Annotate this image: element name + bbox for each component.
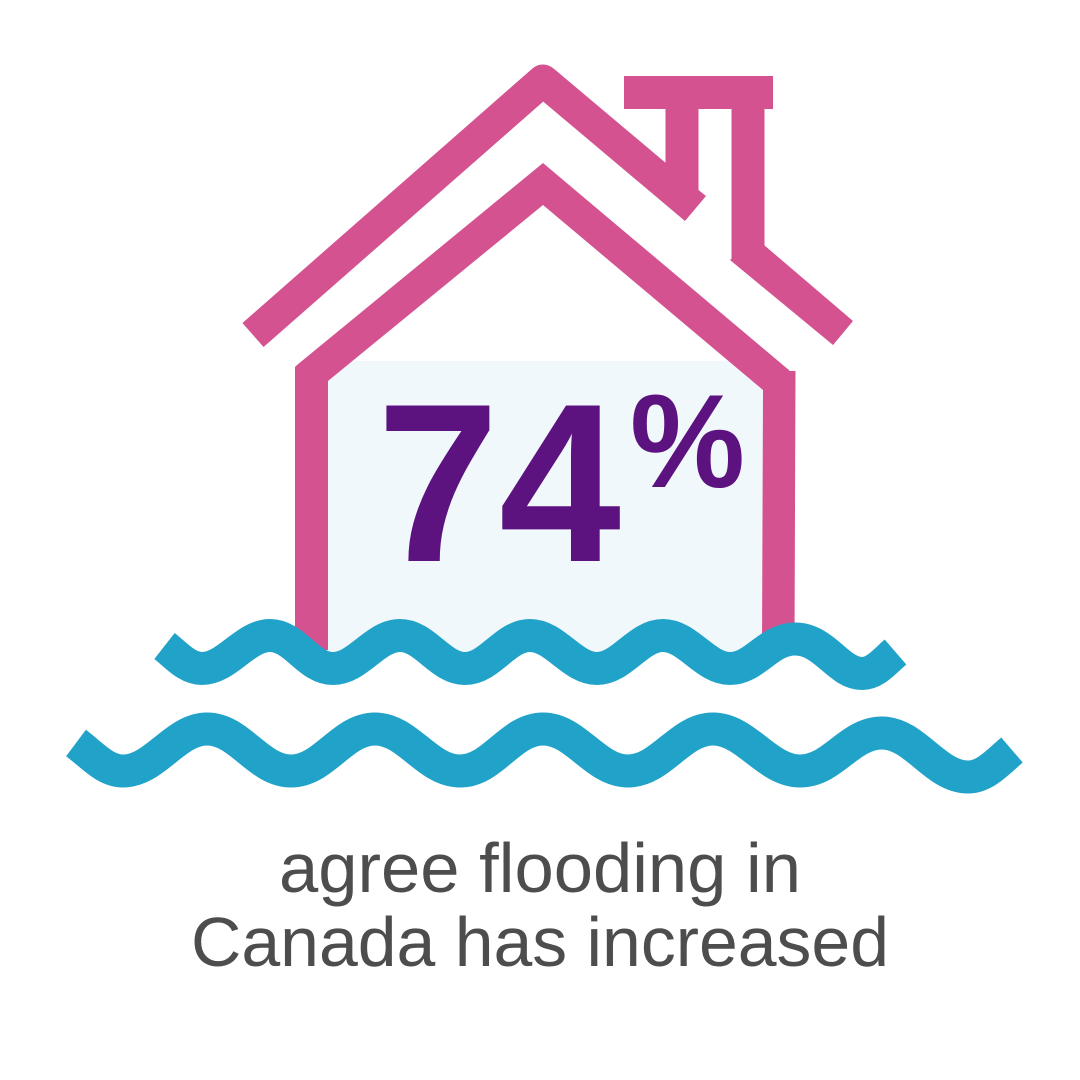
statistic: percent sign: %	[630, 368, 745, 516]
outer roof left and right	[253, 80, 695, 335]
statistic: 74: 74	[377, 356, 621, 609]
house interior panel	[328, 361, 764, 668]
chimney	[624, 76, 773, 258]
waves	[76, 636, 1012, 777]
caption line 1: agree flooding in	[279, 829, 801, 907]
upper wave	[164, 636, 896, 674]
house walls and inner roof	[295, 163, 796, 650]
caption line 2: Canada has increased	[191, 903, 889, 981]
icon: house	[253, 76, 853, 650]
lower roof right segment	[730, 240, 853, 345]
lower wave	[76, 729, 1012, 777]
caption	[191, 829, 889, 981]
